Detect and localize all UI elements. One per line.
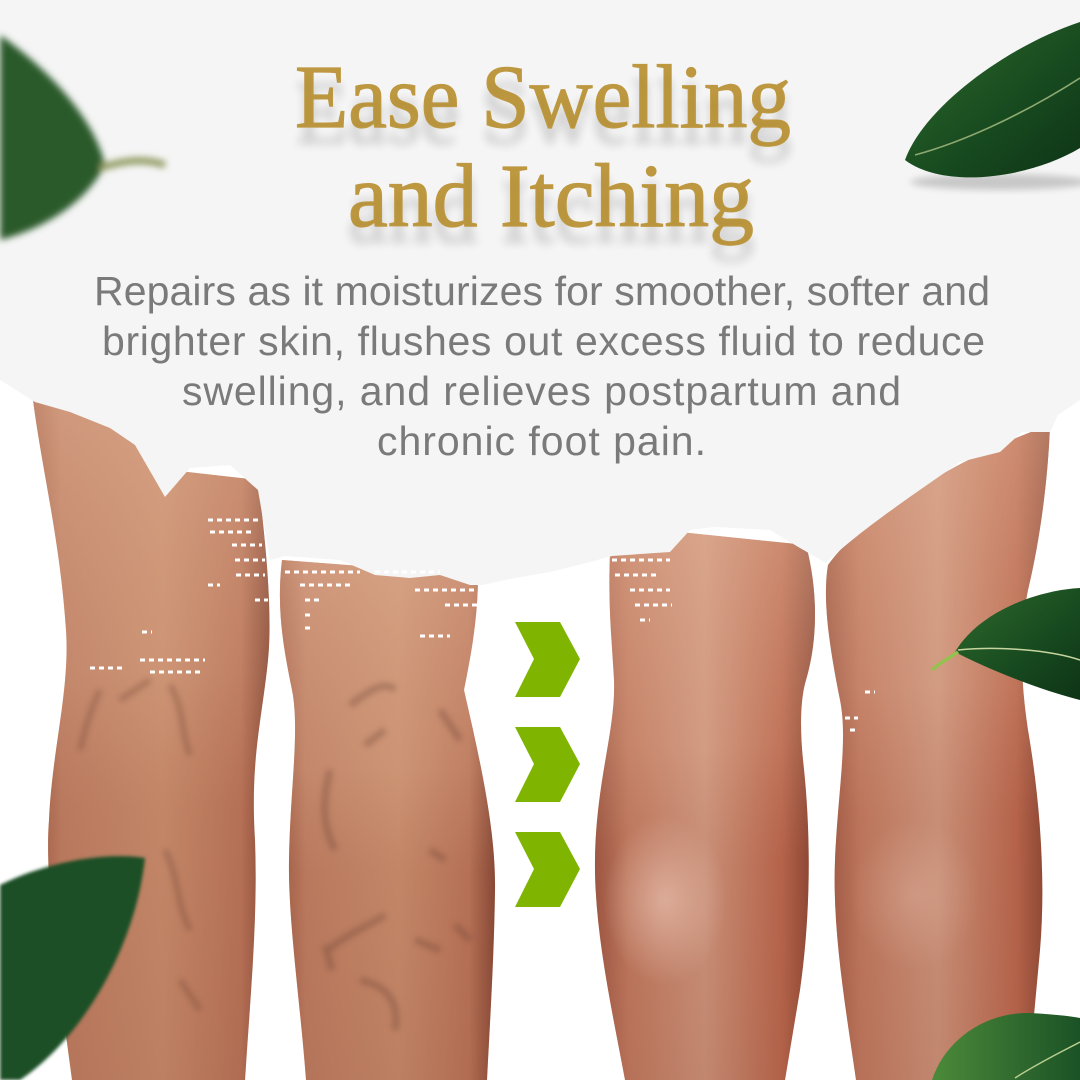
leg: left before, inner (280, 560, 495, 1080)
title: Ease Swelling (295, 48, 791, 147)
body text: brighter skin, flushes out excess fluid to reduce (102, 318, 985, 364)
body text: swelling, and relieves postpartum and (182, 368, 901, 414)
body text: chronic foot pain. (377, 418, 706, 464)
title: and Itching (348, 147, 754, 246)
title (295, 48, 791, 246)
veins: left inner leg (325, 686, 470, 1030)
body text (94, 268, 990, 464)
leaf: right middle (932, 588, 1080, 700)
leg: right outer (826, 425, 1050, 1080)
leg: right before-after inner (595, 525, 815, 1080)
leg: left before, outer (33, 400, 270, 1080)
white speckles on legs (90, 520, 875, 730)
leaf: bottom-left blurred (0, 856, 145, 1080)
body text: Repairs as it moisturizes for smoother, softer and (94, 268, 990, 314)
leaf: bottom-right (932, 1013, 1080, 1080)
chevron 3 (515, 832, 580, 907)
arrow chevrons (515, 622, 580, 907)
veins: left outer leg (80, 680, 200, 1010)
chevron 2 (515, 727, 580, 802)
grey brush background (0, 0, 1080, 585)
leaf: top-right (905, 22, 1080, 190)
leaf: top-left blurred (0, 35, 165, 240)
chevron 1 (515, 622, 580, 697)
